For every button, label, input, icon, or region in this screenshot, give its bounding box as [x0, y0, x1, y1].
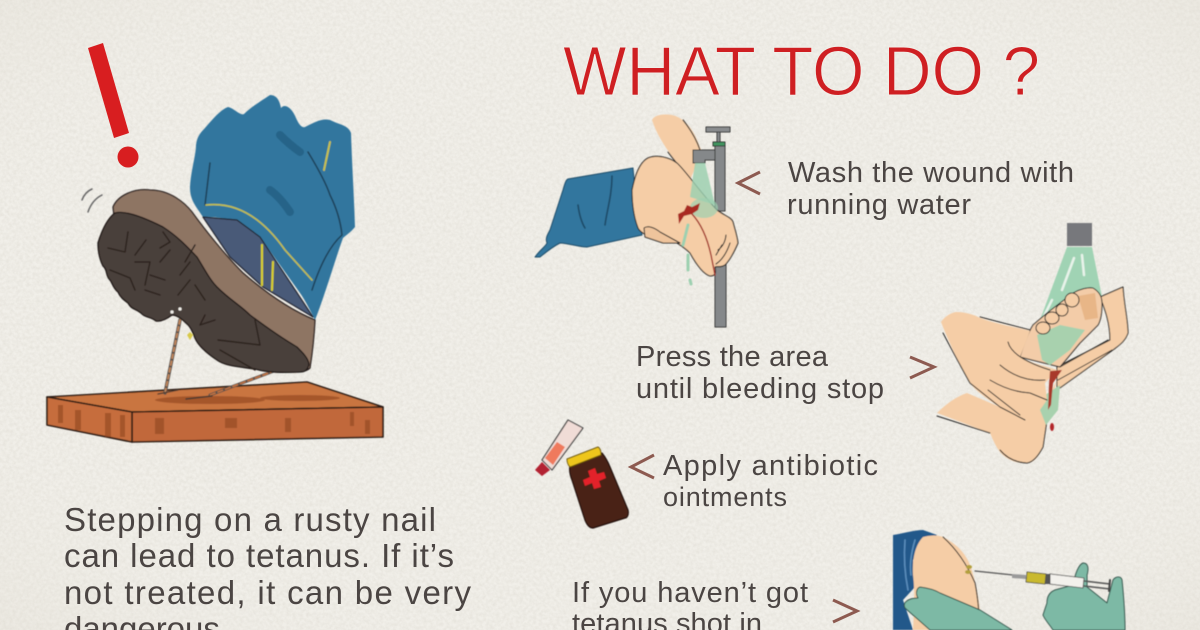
raised foot heel: [652, 115, 702, 180]
text: step 3: Apply antibiotic: [663, 450, 878, 482]
text: step 4: [572, 577, 808, 630]
toes: [1036, 293, 1079, 334]
blood: [1048, 370, 1062, 410]
brick board: [47, 382, 383, 442]
rusty nails: [158, 320, 290, 399]
text: step 4: If you haven’t got: [572, 577, 808, 609]
illustration: boot stepping on rusty nail: [47, 95, 383, 442]
text: step 1: running water: [787, 189, 971, 221]
tap: [693, 127, 730, 163]
boot tread sole: [98, 212, 309, 372]
title: WHAT TO DO ?: [563, 32, 1040, 110]
step 2: press the area illustration: [937, 223, 1128, 463]
step 3: ointment illustration: [535, 420, 628, 528]
nail puncture sparks: [170, 307, 182, 314]
injection marks: [965, 565, 972, 574]
ointment jar: [570, 453, 628, 528]
text block: warning: not treated, it can be very: [64, 574, 472, 611]
pressing hand: [941, 312, 1057, 420]
step 1: wash the wound illustration: [535, 115, 738, 327]
text block: warning: can lead to tetanus. If it’s: [64, 537, 454, 574]
impact motion lines: [82, 189, 102, 212]
text: step 1: Wash the wound with: [788, 157, 1074, 189]
syringe: [975, 571, 1110, 591]
text block: warning: [64, 501, 472, 630]
boot upper: [203, 217, 313, 317]
icon: red exclamation mark: [88, 43, 138, 168]
red cross: [583, 468, 606, 489]
trouser leg: [190, 95, 355, 320]
chevron: step 3: [631, 455, 654, 478]
wound and blood: [678, 203, 700, 224]
text: step 2: Press the area: [636, 341, 829, 373]
text block: warning: Stepping on a rusty nail: [64, 501, 436, 538]
text: step 2: [636, 341, 884, 405]
right glove: [1043, 563, 1125, 630]
supporting hand: [644, 227, 680, 243]
upper arm: [913, 536, 980, 630]
text: step 1: [787, 157, 1074, 221]
water stream: [690, 163, 715, 205]
left glove: [904, 587, 1012, 630]
toes: [716, 235, 730, 264]
text: step 3: ointments: [663, 482, 787, 512]
chevron: step 2: [910, 357, 934, 378]
runoff water: [683, 225, 691, 284]
main foot: [632, 156, 738, 276]
faucet head: [1067, 223, 1092, 246]
lower pipe: [715, 262, 726, 327]
rolled sleeve: [893, 530, 937, 630]
chevron: step 4: [833, 600, 857, 622]
sleeve: [535, 168, 642, 257]
upper pipe: [715, 143, 725, 211]
foot sole: [1020, 288, 1102, 367]
chevron: step 1: [738, 172, 760, 194]
ointment tube: [542, 420, 583, 470]
boot midsole: [113, 190, 315, 371]
lower heel: [937, 380, 1057, 463]
text: step 3: [663, 450, 878, 512]
text: step 2: until bleeding stop: [636, 373, 884, 405]
step 4: tetanus shot illustration: [893, 530, 1125, 630]
supporting palm: [1057, 287, 1128, 390]
water stream: [1040, 247, 1102, 320]
